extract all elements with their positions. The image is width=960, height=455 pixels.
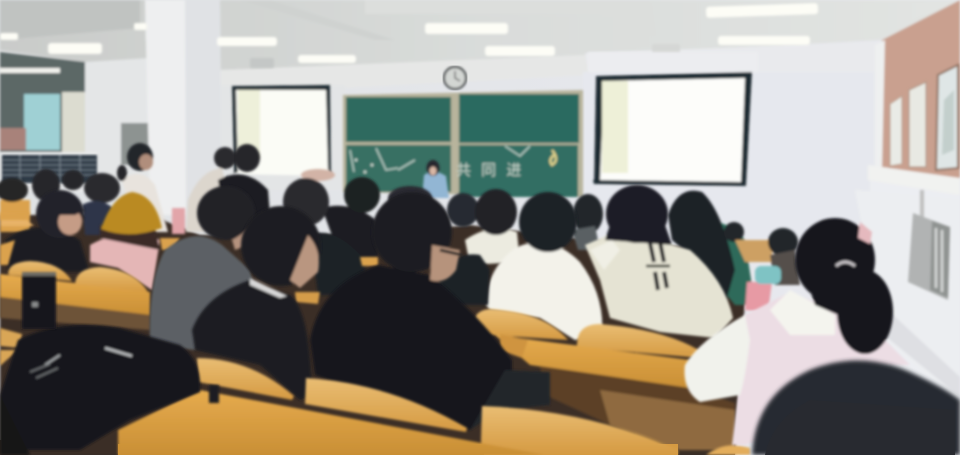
blackboard chalk writing: 共 同 进	[456, 162, 524, 179]
dark floor and under-desk shadow	[0, 215, 745, 455]
projector screen: right	[588, 52, 758, 186]
ceiling	[0, 0, 960, 70]
upper wall	[220, 55, 590, 92]
standing pair near column	[186, 168, 226, 232]
white hooded student	[486, 192, 602, 340]
ceiling lights	[0, 3, 818, 68]
student in white and pink jacket, right	[685, 218, 910, 445]
student in dark jacket, left	[5, 190, 92, 280]
desks and chairs, back row	[0, 212, 378, 330]
radiator	[908, 190, 950, 300]
blackboard	[343, 90, 583, 197]
right wall	[878, 0, 960, 210]
far right back	[690, 220, 755, 305]
standing student	[122, 174, 168, 232]
far desks left	[0, 200, 30, 232]
wall front	[220, 85, 345, 190]
desk and chairs, front row	[0, 328, 750, 455]
middle back	[447, 193, 479, 227]
wall clock	[444, 67, 466, 89]
black backpack on desk	[0, 325, 219, 455]
back rows of students	[0, 143, 800, 312]
student in black puffer, centre	[310, 192, 550, 430]
black thermos flask	[22, 272, 56, 329]
left window area	[0, 52, 85, 152]
notice board on the left wall	[2, 155, 97, 183]
student in yellow hat and pink jacket	[90, 192, 162, 290]
student with cream jacket and black stripes	[585, 185, 733, 338]
pink bottle	[172, 208, 185, 234]
student in grey sweater	[150, 186, 255, 350]
desk and chairs, middle row	[473, 309, 735, 450]
projector screen: left	[232, 85, 331, 176]
wall pictures	[890, 65, 958, 170]
student in navy hoodie	[192, 206, 321, 400]
mid row heads	[322, 206, 378, 258]
pink and teal bottle	[745, 282, 772, 312]
blurred head in the foreground	[752, 360, 960, 455]
dark-haired student beside the white hoodie	[436, 254, 490, 305]
column	[145, 0, 222, 215]
lecturer at the board	[422, 160, 449, 198]
